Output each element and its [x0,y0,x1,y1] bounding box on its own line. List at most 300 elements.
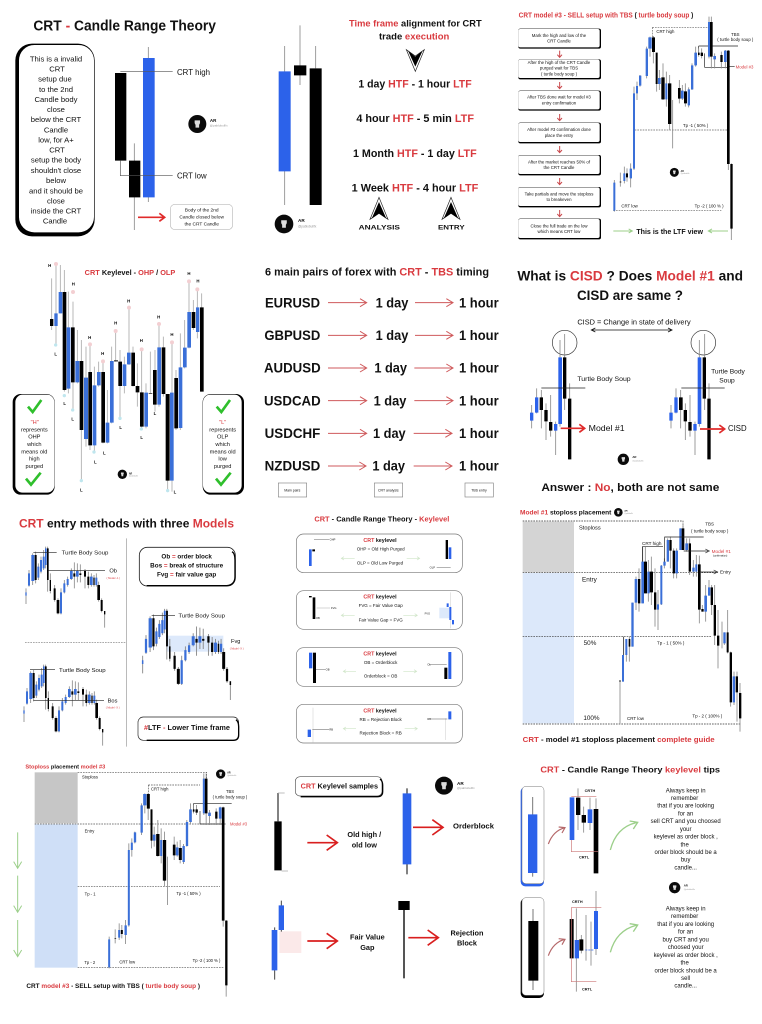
logo [670,168,690,177]
tip text: buy: order block should be a [655,968,717,974]
flow steps: to breakeven [546,197,572,202]
chart labels: (confirmation) [713,555,727,558]
caption: CRT model #3 - SELL setup with TBS ( turtle body soup ) [26,983,200,990]
callout: L OLP: which [214,442,230,448]
tip text: sell: Always keep in [666,788,706,794]
chart: CRT low [621,204,639,209]
chart: Ob: ( Model -1 ) [107,576,120,580]
mini chart: sell: CRTH [585,789,596,793]
callout: invalid setup text: below the CRT [31,115,82,124]
orderblock [403,788,495,874]
old high old low: old low [352,841,377,850]
callout: H OHP: purged [26,464,43,470]
panel: CISD vs model 1 [517,269,747,494]
logo: AR [632,455,636,459]
chart: Fvg: ( Model -X ) [230,647,244,651]
flow steps: After model #3 confirmation done [527,127,591,132]
callout: H OHP: high [29,457,40,463]
heading box: CRT Keylevel samples [301,783,378,790]
fair value gap [272,901,385,980]
callout: body closed below: Candle closed below [179,215,224,221]
pair rows: 1 day [376,327,409,343]
logo [618,454,643,465]
timeframe pairs: 4 hour HTF - 5 min LTF [356,113,474,125]
logo [275,215,317,233]
card: blue candle [521,786,544,886]
callout: invalid setup text: This is a invalid [30,54,82,63]
callout: abbreviations [139,547,235,586]
chart: Fvg: Fvg [231,639,240,645]
callout: invalid setup text: Candle [43,217,67,226]
callout: invalid setup text: CRT [49,145,65,154]
logo [435,777,475,795]
arrow [138,213,165,221]
callout: L OLP: OLP [217,435,229,441]
chart: Ob: Turtle Body Soup [62,550,108,556]
logo: AR [681,170,684,173]
callout: invalid setup text: inside the CRT [31,206,82,215]
logo: AR [210,118,217,123]
card: FVG: FVG = Fair Value Gap [359,603,403,608]
chart labels: CRT high [642,541,662,546]
callout: L OLP: means old [210,449,236,455]
card: FVG: FVG [425,611,430,615]
flow steps: After the high of the CRT Candle [528,60,591,65]
purge markers: H [101,351,104,356]
callout: lower time frame [138,717,239,740]
callout: L OLP [203,394,244,495]
callout: L OLP: low [218,457,228,463]
purge markers: L [80,488,83,493]
logo: @pablobullfx [632,461,643,463]
column labels [278,483,493,497]
tip text: sell: order block should be a [655,850,717,856]
pair rows: 1 hour [459,294,499,310]
title: 6 main pairs of forex with CRT - TBS timing [265,266,489,278]
purge markers: H [114,320,117,325]
flow steps [518,29,601,239]
flow steps: purged wait for TBS [540,66,578,71]
title [517,269,743,303]
curved arrows [548,821,638,956]
title: CRT Keylevel - OHP / OLP [85,268,175,277]
card: RB: RB [329,727,333,731]
card: black candle [521,898,544,998]
mini chart: sell [570,788,598,873]
timeframe pairs [352,78,479,195]
definition: CISD = Change in state of delivery [577,319,691,326]
chart: Bos [23,665,120,746]
callout: abbreviations: Ob = order block [161,553,212,560]
card: OHP OLP: OHP = Old High Purged [357,546,405,551]
flow arrows [557,51,562,217]
flow steps: CRT Candle [547,38,571,43]
icon: chevron down [406,50,424,71]
panel: keylevel tips [521,764,721,998]
chart: CISD: Turtle Body [711,368,746,375]
chart: Model #3 [736,64,754,69]
callout: invalid setup text: close [47,105,65,114]
chart labels: Tp - 2 [84,960,96,965]
purge markers: L [103,450,106,455]
chart labels: CRT low [627,716,645,721]
chart [613,17,754,240]
logo: AR [457,781,464,786]
title: What is CISD ? Does Model #1 and [517,269,743,284]
chart: CISD: CISD [728,424,747,433]
chart: model 1: Turtle Body Soup [577,376,631,383]
chart labels: CRT low [119,960,136,965]
tip text: buy: remember [671,914,698,920]
arrows [328,299,453,470]
chart: CISD: Soup [719,377,735,384]
callout: L OLP: purged [214,464,231,470]
panel: model 3 stoploss [14,764,248,997]
purge markers: H [140,338,143,343]
heading [349,19,482,41]
tip text: buy: for an [678,930,693,936]
orderblock: Orderblock [453,822,495,831]
chart labels: Tp - 1 [85,892,96,897]
icon: entry arrow: ENTRY [438,225,465,231]
tip text: buy: candle... [674,984,697,990]
chart: TBS [731,32,740,37]
card: FVG [296,591,462,629]
pair rows: 1 day [372,458,405,474]
logo: @pablobullfx [298,225,317,229]
candle chart [50,263,204,492]
fair value gap: Fair Value [350,932,385,941]
chart labels: Stoploss [579,525,601,531]
card: OHP OLP [296,534,462,573]
purge markers: H [48,263,51,268]
pair rows: 1 hour [459,392,499,408]
callout: invalid setup text: below [46,176,66,185]
mini chart: buy [570,891,601,992]
callout: L OLP: "L" [219,420,226,426]
caption: LTF view: This is the LTF view [636,229,704,236]
purge markers: L [174,489,177,494]
chart: model 1: Model #1 [589,424,625,433]
pair rows: AUDUSD [264,360,321,376]
heading: trade execution [379,31,450,41]
callout: invalid setup text: setup the body [31,156,81,165]
pair rows: 1 hour [459,425,499,441]
panel: candle range theory [15,18,233,236]
green down arrows [14,832,22,957]
logo: AR [298,218,305,223]
tip text: sell: that if you are looking [657,804,714,810]
pair rows: 1 hour [459,458,499,474]
callout: invalid setup text: Candle [44,125,68,134]
label: CRT high: CRT high [177,67,210,77]
fair value gap: Gap [360,943,375,952]
caption: CRT - model #1 stoploss placement complete guide [523,737,715,744]
chart: Tp -2 ( 100 % ) [695,204,724,209]
logo: @pablobullfx [210,124,228,128]
chart labels [82,774,248,965]
chart: Fvg [142,609,244,700]
chart labels: Model #3 [230,821,248,826]
purge markers [48,262,200,494]
purge markers: L [140,435,143,440]
tip text: sell: candle... [674,865,697,871]
callout: H OHP [13,394,55,495]
callout: H OHP: OHP [28,435,41,441]
title: CRT - Candle Range Theory keylevel tips [540,764,720,774]
card: OB: CRT keylevel [363,652,397,658]
chart: Bos: ( Model -X ) [106,705,120,709]
chart: Ob [25,547,120,628]
callout: H OHP: "H" [31,420,39,426]
callout: invalid setup text: CRT [49,64,65,73]
card: OB: Orderblock = OB [364,674,397,679]
chart labels: CRT high [151,787,169,792]
column labels: TBS entry [471,488,487,492]
chart labels: TBS [705,522,714,527]
zone: stoploss [35,772,78,823]
logo [216,769,237,779]
chart: CRT high [656,29,675,34]
card: FVG: CRT keylevel [363,595,397,601]
icon: analysis arrow: ANALYSIS [359,225,400,231]
callout: H OHP: represents [21,427,48,433]
logo: AR [684,884,688,888]
flow steps: place the entry [545,133,574,138]
answer: Answer : No, both are not same [541,482,719,494]
zone: stoploss [523,522,574,572]
chart labels: ( turtle body soup ) [213,795,248,800]
heading: Time frame alignment for CRT [349,19,482,29]
logo [118,470,138,479]
callout: invalid setup text: setup due [38,75,72,84]
card: RB: Rejection Block = RB [360,731,402,736]
chart: CISD [669,330,747,459]
tip text: buy: choosed your [668,945,704,951]
callout: invalid setup text: to the 2nd [39,85,73,94]
chart: Fvg: Turtle Body Soup [178,613,225,619]
chart labels: Tp -1 ( 50% ) [176,891,201,896]
purge markers: H [127,298,130,303]
old high old low [274,793,381,871]
chart labels: TBS [226,789,234,794]
pair rows: 1 hour [459,360,499,376]
mini chart: buy: CRTL [582,988,593,992]
logo: AR [624,509,628,512]
rejection block: Block [457,939,478,948]
candlestick diagram [115,47,173,230]
icon: entry arrow [438,197,465,231]
callout: body closed below [170,204,233,230]
old high old low: Old high / [347,830,381,839]
chart [108,773,232,997]
tip text: sell: buy [681,858,690,864]
timeframe pairs: 1 day HTF - 1 hour LTF [358,78,472,90]
rejection block: Rejection [451,928,484,937]
chart labels: Entry [582,576,598,583]
flow steps: After the market reaches 50% of [528,159,591,164]
flow steps: After TBS done wait for model #3 [527,95,591,100]
panel: keylevel OHP OLP [13,262,244,495]
callout: invalid setup text: shouldn't close [31,166,81,175]
chart: Bos: Bos [108,699,118,705]
title: Model #1 stoploss placement [520,510,612,517]
title: CRT entry methods with three Models [19,516,234,530]
flow steps: which means CRT low [538,229,581,234]
chart labels: Model #1 [712,549,731,554]
tip text: buy: that if you are looking [657,922,714,928]
title: CRT - Candle Range Theory - Keylevel [314,514,449,523]
logo: @pablobullfx [227,775,237,777]
pair rows [264,294,499,474]
chart: model 1 [530,330,631,459]
callout: invalid setup text: and it should be [29,186,83,195]
pair rows: 1 day [376,294,409,310]
callout: body closed below: Body of the 2nd [185,208,219,214]
logo [188,115,228,133]
rejection block [398,901,484,978]
purge markers: H [196,279,200,284]
tip text: buy: Always keep in [666,906,706,912]
callout: H OHP: means old [21,449,47,455]
callout: abbreviations: Fvg = fair value gap [157,571,216,578]
logo: @pablobullfx [457,786,475,790]
tip text: buy: buy CRT and you [662,937,709,943]
title: CRT model #3 - SELL setup with TBS ( turtle body soup ) [519,13,693,20]
purge markers: L [54,351,57,356]
card: OB [296,648,462,686]
logo: @pablobullfx [681,173,690,175]
pair rows: USDCHF [265,425,321,441]
callout: body closed below: the CRT Candle [184,222,219,228]
chart labels [579,522,732,722]
timeframe pairs: 1 Month HTF - 1 day LTF [353,148,477,160]
candles [279,25,322,205]
definition [577,319,691,332]
tip text: buy: the [681,961,689,967]
title: Stoploss placement model #3 [25,764,105,770]
logo [669,882,695,893]
chart labels: 100% [583,715,600,722]
caption: LTF view [613,229,728,236]
card: FVG: FVG [331,606,336,610]
tip text: sell: sell CRT and you choosed [651,819,721,825]
flow steps: the CRT Candle [544,165,575,170]
purge markers: L [63,401,66,406]
callout: L OLP: represents [209,427,236,433]
card: FVG: Fair Value Gap = FVG [359,617,403,622]
chart: Tp -1 ( 50% ) [683,123,709,128]
logo: AR [129,472,133,475]
chart labels: Tp - 1 ( 50% ) [657,640,685,645]
purge markers: H [157,315,160,320]
logo [614,508,633,517]
pair rows: GBPUSD [264,327,320,343]
panel: keylevel boxes [296,514,462,743]
card: RB: RB [427,717,431,721]
flow steps: Take partials and move the stoploss [525,191,593,196]
card: OB: OB [326,667,330,671]
pair rows: NZDUSD [265,458,320,474]
card: FVG: OB [316,616,320,620]
tip text: buy [654,906,718,990]
label: CRT low: CRT low [177,170,208,180]
panel: model 3 sell setup [518,13,754,240]
zone: target [35,824,78,968]
purge markers: H [187,271,191,276]
chart labels: 50% [584,640,597,647]
title: CRT - Candle Range Theory [33,18,217,34]
pair rows: EURUSD [265,294,320,310]
chart labels: Tp - 2 ( 100% ) [692,713,723,718]
flow steps: ( turtle body soup ) [541,71,578,76]
pair rows: 1 day [373,425,406,441]
panel: forex pairs timing [264,266,499,497]
panel: time frame alignment [275,19,482,233]
panel: keylevel samples [272,777,495,980]
chart labels: Entry [85,829,95,834]
flow steps: Close the full trade on the low [530,223,588,228]
tip text: sell: your [680,827,691,833]
callout: invalid setup text [15,44,95,236]
column labels: CRT analysis [378,488,399,492]
tip text: sell: remember [671,796,698,802]
purge markers: H [72,281,75,286]
column labels: Main pairs [284,488,301,492]
zone: entry to target [523,573,574,723]
chart labels: Stoploss [82,774,98,779]
purge markers: L [71,416,74,421]
callout: abbreviations: Bos = break of structure [150,562,224,569]
card: OHP OLP: OHP [330,537,336,541]
tip text: sell: the [681,842,689,848]
title: CISD are same ? [577,288,683,303]
tip text: buy: sell [681,976,690,982]
callout: lower time frame: #LTF - Lower Time frame [144,725,230,732]
pair rows: 1 day [374,360,407,376]
flow steps: entry confirmation [542,101,577,106]
tip text: sell: for an [678,811,693,817]
purge markers: H [170,332,174,337]
pair rows: USDCAD [264,392,321,408]
callout: invalid setup text: low, for A+ [38,135,74,144]
icon: analysis arrow [359,197,400,231]
callout: invalid setup text: close [47,196,65,205]
pair rows: 1 day [374,392,407,408]
logo: @pablobullfx [624,513,633,515]
card: OB: Ob [427,662,431,666]
card: RB [296,704,462,743]
chart [619,523,741,732]
callout: H OHP: which [26,442,42,448]
purge markers: L [94,459,97,464]
tip text: buy: keylevel as order block , [654,953,718,959]
tip text: sell: keylevel as order block , [654,835,718,841]
card: OHP OLP: OLP [430,565,435,569]
callout: invalid setup text: Candle body [34,95,78,104]
purge markers: L [154,411,157,416]
logo: @pablobullfx [684,889,695,891]
tip text: sell [651,788,721,871]
timeframe pairs: 1 Week HTF - 4 hour LTF [352,183,479,195]
purge markers: H [88,335,91,340]
chart: ( turtle body soup ) [717,37,754,42]
pair rows: 1 hour [459,327,499,343]
chart labels: Tp -2 ( 100 % ) [193,958,221,963]
purge markers: L [119,425,122,430]
card: RB: RB = Rejection Block [360,717,403,722]
card: OHP OLP: CRT keylevel [363,538,397,544]
